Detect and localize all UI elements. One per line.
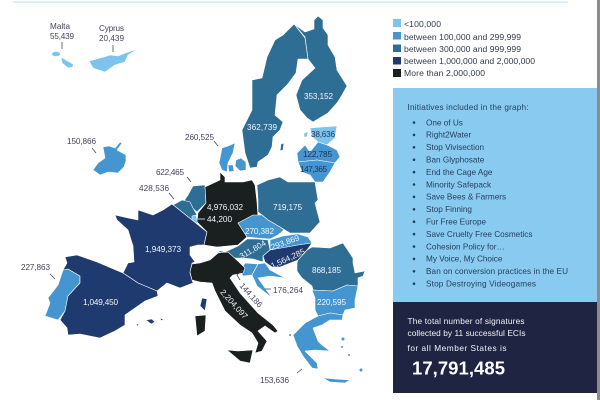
legend: between 300,000 and 999,999: [404, 44, 521, 54]
country: Sweden: [242, 24, 308, 168]
label: Slovenia: [237, 270, 264, 310]
list of initiatives: Fur Free Europe: [426, 218, 487, 226]
list of initiatives: Stop Vivisection: [426, 143, 485, 152]
label: Belgium: [139, 184, 174, 199]
country: Netherlands: [184, 185, 206, 212]
country: Italy: [190, 252, 278, 363]
label: Portugal: [21, 263, 55, 279]
list of initiatives: Stop Finning: [426, 205, 472, 214]
label: Germany: 4,976,032: [207, 203, 243, 212]
country: Slovenia: [240, 263, 258, 276]
list of initiatives: Ban Glyphosate: [426, 156, 485, 164]
label: Sweden: 362,739: [247, 123, 277, 132]
total signatures text: for all Member States is: [408, 343, 506, 353]
list of initiatives: End the Cage Age: [426, 168, 493, 177]
list of initiatives: Minority Safepack: [426, 180, 492, 189]
map of EU member states: [45, 16, 365, 383]
label: France: 1,949,373: [145, 245, 181, 254]
total signatures text: The total number of signatures: [408, 316, 524, 326]
label: Romania: 868,185: [312, 266, 341, 275]
country: Greece: [289, 313, 362, 383]
country: Bulgaria: [312, 285, 358, 316]
label: Poland: 719,175: [273, 203, 302, 212]
panel: total signatures: [393, 302, 597, 393]
legend: between 1,000,000 and 2,000,000: [404, 56, 535, 66]
country: Corsica: [200, 298, 207, 311]
country: Poland: [257, 177, 320, 233]
heading: initiatives: Initiatives included in the graph:: [408, 103, 528, 112]
list of initiatives: Stop Destroying Videogames: [426, 280, 536, 288]
label: Slovenia: 144,186: [238, 281, 264, 310]
label: Netherlands: 622,465: [156, 168, 184, 177]
label: Estonia: 38,636: [311, 130, 335, 139]
label: Netherlands: [156, 168, 191, 182]
label: Bulgaria: 220,595: [317, 298, 346, 307]
list of initiatives: Cohesion Policy for…: [426, 242, 505, 251]
country: Croatia: [252, 263, 285, 298]
list of initiatives: Save Bees & Farmers: [426, 193, 506, 202]
total number: 17,791,485: [412, 358, 505, 378]
country: Austria: [217, 239, 270, 262]
label: Spain: 1,049,450: [83, 298, 118, 307]
country: Portugal: [45, 269, 80, 320]
list of initiatives: One of Us: [426, 118, 463, 127]
label: Luxembourg: 44,200: [207, 215, 232, 224]
label: Cyprus: [99, 24, 124, 52]
label: Ireland: 150,866: [67, 137, 96, 146]
label: Malta: [50, 22, 74, 49]
list of initiatives: [413, 118, 568, 288]
list of initiatives: Right2Water: [426, 131, 471, 140]
country: France: [115, 204, 207, 291]
label: Austria: 311,804: [238, 238, 268, 261]
label: Denmark: [185, 133, 218, 146]
label: Italy: 2,204,097: [218, 288, 250, 321]
country: Romania: [297, 243, 365, 291]
legend: between 100,000 and 299,999: [404, 32, 521, 42]
label: Slovakia: 293,869: [270, 233, 301, 252]
total signatures text: [408, 316, 526, 353]
label: Belgium: 428,536: [139, 184, 169, 193]
total signatures text: collected by 11 successful ECIs: [408, 328, 526, 338]
label: Cyprus: 20,439: [99, 34, 124, 43]
country: Latvia: [297, 142, 340, 163]
label: Finland: 353,152: [304, 92, 333, 101]
label: Croatia: 176,264: [273, 286, 303, 295]
country: Finland: [294, 16, 347, 122]
label: Portugal: 227,863: [21, 263, 50, 272]
label: Denmark: 260,525: [185, 133, 214, 142]
country: Hungary: [263, 243, 312, 267]
label: Malta: 55,439: [50, 32, 74, 41]
label: Greece: 153,636: [260, 376, 289, 385]
country: Slovakia: [270, 234, 312, 250]
country: Estonia: [304, 126, 337, 145]
label: Greece: [260, 369, 302, 385]
country: Luxembourg: [192, 215, 198, 224]
country: Spain: [60, 255, 163, 338]
label: Cyprus: Cyprus: [99, 24, 124, 33]
legend: [393, 19, 535, 78]
list of initiatives: My Voice, My Choice: [426, 255, 503, 264]
country: Belgium: [173, 200, 197, 220]
list of initiatives: Ban on conversion practices in the EU: [426, 267, 568, 276]
list of initiatives: Save Cruelty Free Cosmetics: [426, 230, 532, 239]
label: Czechia: 270,382: [245, 227, 274, 236]
label: Latvia: 122,785: [303, 150, 332, 159]
label: Ireland: [67, 137, 96, 153]
country: Czechia: [238, 215, 284, 239]
label: Malta: Malta: [50, 22, 70, 31]
country: Ireland: [93, 142, 126, 175]
panel: initiatives list: [393, 88, 597, 302]
legend: More than 2,000,000: [404, 68, 485, 78]
country: Malta: [52, 52, 73, 68]
country: Denmark: [219, 143, 246, 172]
country: Cyprus: [89, 49, 138, 72]
country: Lithuania: [298, 160, 335, 182]
country: Germany: [197, 172, 258, 247]
legend: <100,000: [404, 19, 441, 29]
label: Lithuania: 147,365: [300, 165, 327, 174]
label: Hungary: 1,564,285: [270, 247, 307, 271]
